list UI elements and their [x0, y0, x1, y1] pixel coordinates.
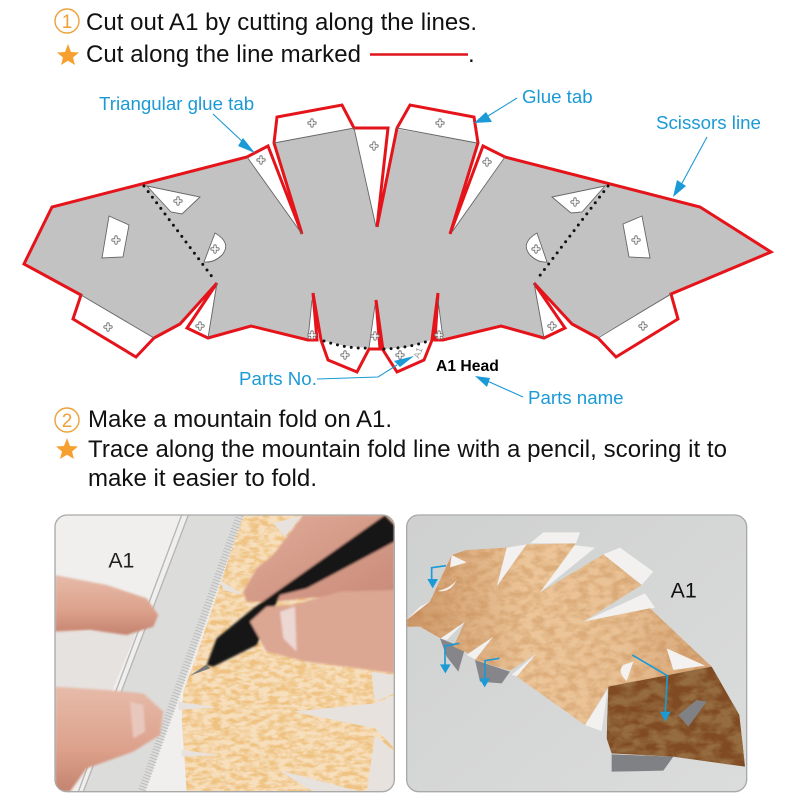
label: glue tab: Glue tab: [522, 86, 593, 107]
mountain fold dots: [144, 186, 608, 349]
glue tab crosses: [105, 120, 646, 358]
photo: folded fur sheet: [407, 515, 747, 792]
note: scoring instructions: Trace along the mountain fold line with a pencil, scoring it to: [88, 436, 727, 463]
photo: cutting with ruler and pen: [55, 515, 397, 792]
icon: star note 2: [56, 438, 78, 459]
label: parts name: Parts name: [528, 387, 624, 408]
step 1 heading: [55, 9, 477, 36]
label: parts no: Parts No.: [239, 368, 317, 389]
red line sample: [370, 53, 468, 56]
label: triangular glue tab: Triangular glue tab: [99, 93, 254, 114]
period after line sample: .: [468, 41, 475, 68]
icon: circled number one: 1: [62, 12, 72, 33]
note: cut along the marked line: Cut along the line marked: [86, 41, 361, 68]
icon: circled number two: 2: [62, 411, 72, 432]
icon: circled number one: [55, 9, 79, 33]
step 2 heading: [55, 406, 392, 433]
label: glue tab: [474, 86, 593, 123]
part name: A1 Head: A1 Head: [436, 358, 499, 375]
white glue marks inside body: [102, 186, 650, 262]
label: scissors line: Scissors line: [656, 112, 761, 133]
note: scoring instructions: make it easier to fold.: [88, 465, 317, 492]
diagram: A1 head pattern: [24, 105, 771, 372]
photo label A1: A1: [108, 549, 134, 573]
step 2 instruction: Make a mountain fold on A1.: [88, 406, 392, 433]
label: scissors line: [656, 112, 761, 197]
label: parts name: [475, 376, 624, 408]
icon: star note: [57, 44, 79, 65]
parts number on tab: A1: [411, 346, 425, 360]
white glue tabs base: [24, 105, 771, 372]
photo label A1: A1: [671, 579, 697, 603]
note: scoring instructions: [88, 436, 727, 492]
label: triangular glue tab: [99, 93, 255, 153]
icon: circled number two: [55, 408, 79, 432]
red cut line overlay: [24, 105, 771, 372]
grey paper body: [26, 128, 768, 349]
label: parts no: [239, 356, 414, 389]
step 1 instruction: Cut out A1 by cutting along the lines.: [86, 9, 477, 36]
fold lines: [81, 128, 671, 348]
